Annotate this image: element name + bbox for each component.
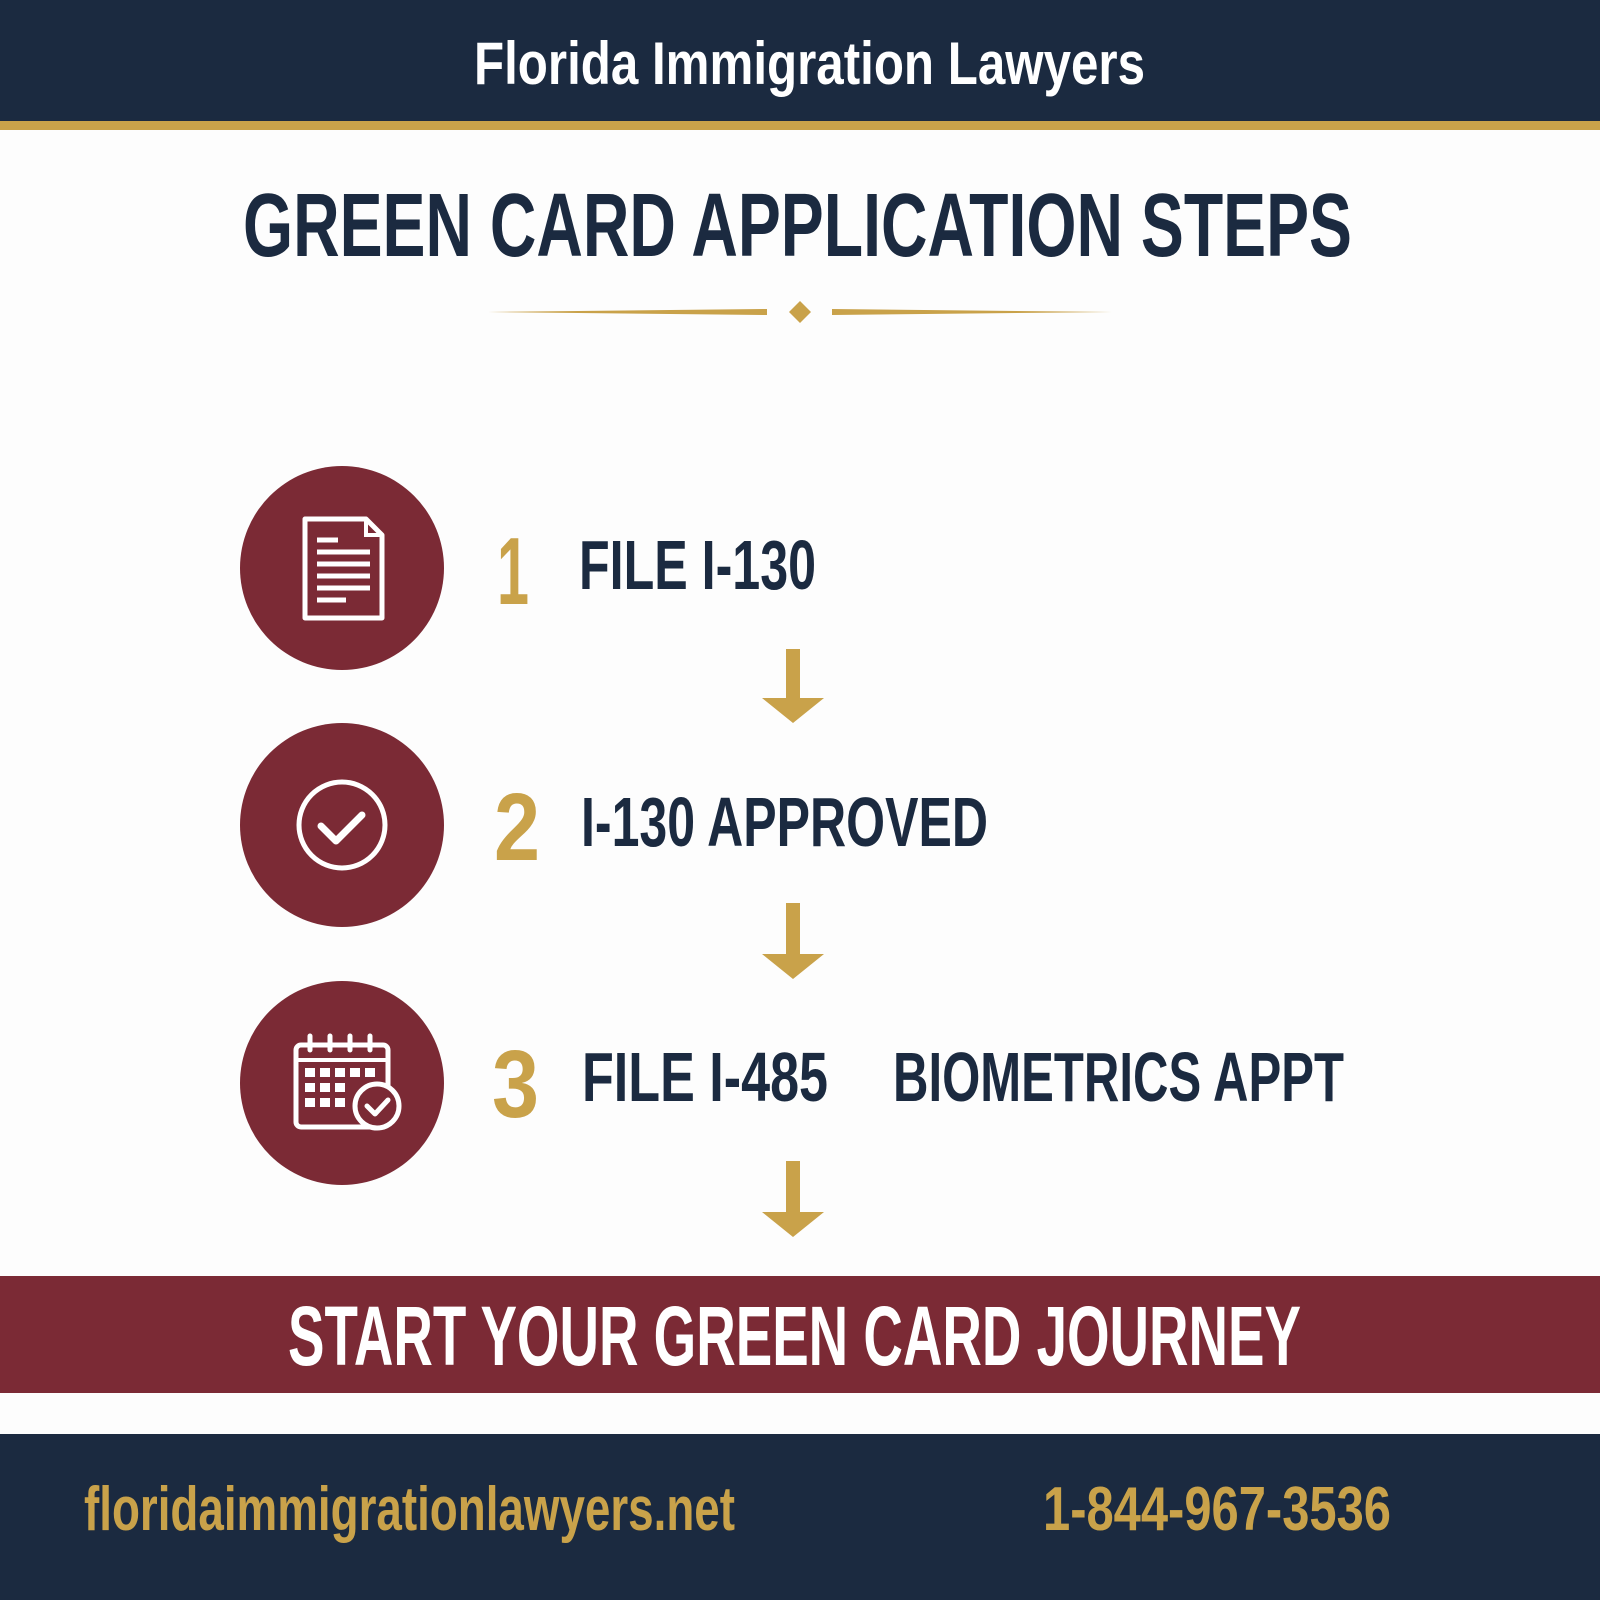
icon: document [240,466,444,670]
icon: check circle [240,723,444,927]
arrow 2 [762,903,824,979]
header bar [0,0,1600,130]
arrow 1 [762,649,824,723]
icon: calendar [240,981,444,1185]
number 3: 3 [492,1031,539,1138]
cta banner [0,1276,1600,1393]
step 3 [240,981,1344,1185]
label: file i-130: FILE I-130 [579,526,816,604]
website: floridaimmigrationlawyers.net [84,1475,735,1544]
label: biometrics appt: BIOMETRICS APPT [893,1038,1344,1116]
phone: 1-844-967-3536 [1043,1475,1391,1544]
step 2 [240,723,988,927]
footer [0,1434,1600,1600]
label: file i-485: FILE I-485 [582,1038,828,1116]
step 1 [240,466,816,670]
title divider [488,301,1112,323]
label: i-130 approved: I-130 APPROVED [581,783,988,861]
number 1: 1 [497,518,529,625]
number 2: 2 [494,774,540,881]
header text: Florida Immigration Lawyers [474,30,1145,97]
arrow 3 [762,1161,824,1237]
